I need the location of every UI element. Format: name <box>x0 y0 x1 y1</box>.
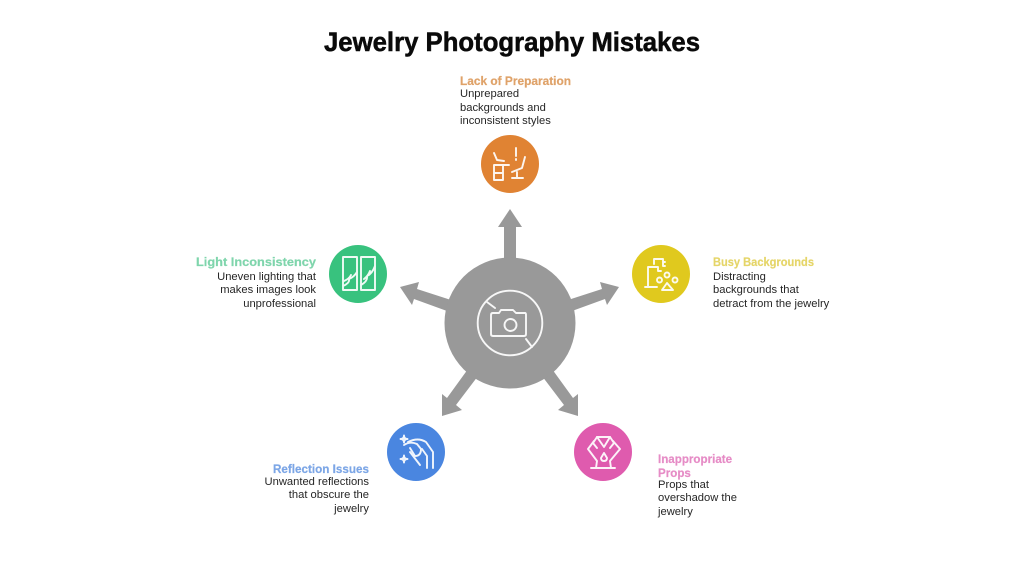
heading: Lack of Preparation <box>460 75 571 88</box>
arrow: lower left <box>442 369 478 416</box>
description: Uneven lighting that <box>217 271 317 283</box>
heading: Props <box>658 467 691 480</box>
arrow: lower right <box>542 369 578 416</box>
icon: necklace on bust <box>588 437 620 468</box>
item: inappropriate props <box>574 423 737 518</box>
description: backgrounds that <box>713 284 800 296</box>
icon: cluttered shapes <box>645 259 678 290</box>
item: lack of preparation <box>460 75 571 193</box>
icon: two light panels <box>343 257 375 290</box>
title: Jewelry Photography Mistakes <box>324 27 700 57</box>
icon circle: blue <box>387 423 445 481</box>
item: busy backgrounds <box>632 245 830 310</box>
icon circle: orange <box>481 135 539 193</box>
description: detract from the jewelry <box>713 298 830 310</box>
description: overshadow the <box>658 492 737 504</box>
arrow: up <box>498 209 522 262</box>
description: that obscure the <box>289 489 369 501</box>
item: reflection issues <box>265 423 445 515</box>
description: inconsistent styles <box>460 115 551 127</box>
icon circle: yellow <box>632 245 690 303</box>
description: Props that <box>658 479 710 491</box>
hub circle <box>444 258 576 388</box>
icon: hand with ring and sparkles <box>400 436 433 468</box>
description: unprofessional <box>243 298 316 310</box>
heading: Inappropriate <box>658 453 733 466</box>
heading: Light Inconsistency <box>196 256 317 269</box>
icon: crossed-out camera <box>478 291 542 355</box>
description: Distracting <box>713 271 766 283</box>
item: light inconsistency <box>196 245 387 310</box>
central hub with arrows <box>400 209 619 416</box>
description: Unprepared <box>460 88 519 100</box>
description: backgrounds and <box>460 102 546 114</box>
arrow: upper right <box>568 282 619 311</box>
description: Unwanted reflections <box>265 476 369 488</box>
arrow: upper left <box>400 282 451 311</box>
heading: Busy Backgrounds <box>713 256 814 269</box>
heading: Reflection Issues <box>273 463 369 476</box>
description: jewelry <box>333 503 369 515</box>
icon circle: green <box>329 245 387 303</box>
icon circle: pink <box>574 423 632 481</box>
icon: desk and chair <box>494 148 525 180</box>
description: makes images look <box>220 284 316 296</box>
description: jewelry <box>657 506 693 518</box>
